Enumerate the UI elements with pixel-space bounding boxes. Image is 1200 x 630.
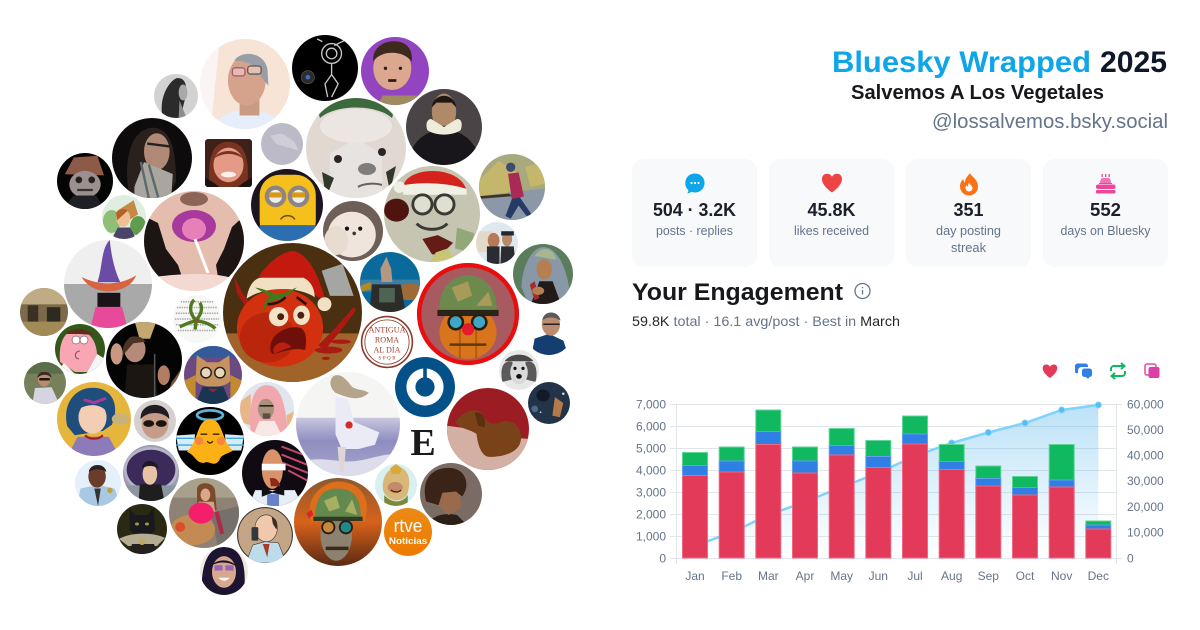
bar: Jan [682,452,708,558]
grid lines [670,404,1122,564]
right axis labels: 30,000 [1127,474,1164,488]
title: 2025 [1100,46,1167,79]
avatar: skull face [57,153,113,209]
left axis labels: 3,000 [636,486,666,500]
stat card: likes [769,159,894,267]
month labels: Apr [796,569,814,583]
month labels: Dec [1088,569,1109,583]
avatar: woman with clown [169,478,239,548]
avatar cluster [20,35,573,595]
bar: Mar [756,410,781,558]
bar: Sep [976,466,1001,558]
month labels: Mar [758,569,779,583]
display name: Salvemos A Los Vegetales [851,82,1104,104]
right axis labels: 60,000 [1127,398,1164,412]
bar: Jul [902,416,928,558]
avatar: woman with purple glasses [200,547,248,595]
avatar: antigua roma logo: ROMA [375,336,399,345]
icon: cake [1096,174,1116,194]
stat card: streak: day posting [936,224,1001,238]
avatar: white alpaca [306,98,406,198]
left axis labels: 6,000 [636,420,666,434]
left axis labels: 1,000 [636,530,666,544]
avatar: boba fett [360,252,420,312]
title: Bluesky Wrapped [832,46,1091,79]
bar: Apr [792,447,818,558]
avatar: scared tomato with santa hat [223,243,362,382]
avatar: rtve noticias logo: rtve [394,515,422,536]
bar: May [829,428,854,558]
icon: heart [822,174,842,192]
avatar: man with glasses [200,39,290,129]
left axis labels [636,398,666,566]
avatar: helmet zombie explosion [294,478,382,566]
stat card: streak: 351 [954,200,984,220]
right axis labels [1127,398,1164,566]
avatar: cartoon man in pod [123,445,179,501]
handle: @lossalvemos.bsky.social [932,111,1168,133]
stat card: posts and replies [632,159,757,267]
avatar: man in dark sunglasses [134,400,176,442]
right axis labels: 0 [1127,552,1134,566]
icon: replies legend [1075,364,1092,379]
avatar: woman with glasses [112,118,192,198]
month labels: Feb [721,569,742,583]
bar: Nov [1049,444,1074,558]
avatar: man in blue shirt [532,312,566,355]
month labels: Jul [907,569,923,583]
icon: quotes legend [1145,364,1160,378]
avatar: antigua roma logo: AL DÍA [374,344,401,354]
avatar: cat with glasses [184,346,242,404]
avatar: fluffy puppy [323,201,383,261]
cumulative line [695,402,1101,546]
avatar: santa glasses drawing [384,166,480,262]
avatar: pink bear costume [240,382,294,436]
month labels: Oct [1016,569,1035,583]
avatar: blue ring logo [395,357,455,417]
avatar: plant on sheet music [173,295,221,343]
stacked bars: replies reposts likes by month [682,410,1111,558]
month labels: Jun [869,569,888,583]
cumulative area [695,405,1098,558]
avatar: woman in white on the sea [296,372,400,476]
avatar: letter E logo: E [410,422,436,464]
left axis labels: 0 [659,552,666,566]
stat card: days on bluesky [1043,159,1168,267]
right axis labels: 10,000 [1127,526,1164,540]
avatar: lollipop lips [144,191,244,291]
right axis labels: 50,000 [1127,423,1164,437]
avatar: tintin character on phone [237,507,293,563]
avatar: el greco portrait [406,89,482,165]
avatar: anime woman [57,382,131,456]
avatar: dachshund on bed [447,388,529,470]
avatar: antigua roma logo: S·P·Q·R [378,356,396,361]
avatar: man on purple [361,37,429,105]
stat card: days on bluesky: days on Bluesky [1060,224,1151,238]
legend [1043,363,1160,379]
avatar: max headroom [242,440,308,506]
bar: Dec [1086,521,1111,558]
avatar: square portrait [205,139,252,187]
month labels: May [830,569,853,583]
avatar: grey portrait [154,74,198,118]
left axis labels: 2,000 [636,508,666,522]
avatar: peter griffin [55,324,105,374]
stat card: streak: streak [951,241,987,255]
avatar: walking woman [479,154,545,220]
avatar: minion [251,169,323,241]
avatar: caricature [375,464,417,506]
stat card: posts and replies: posts · replies [656,224,733,238]
avatar: grey texture [261,123,303,165]
avatar: galaxy [528,382,570,424]
avatar: policeman [75,460,121,506]
avatar: singer on stage [106,322,182,398]
avatar: antigua roma logo: ANTIGUA [369,325,406,334]
avatar: target stick figure [292,35,358,101]
icon: likes legend [1043,364,1057,378]
engagement chart [636,398,1164,583]
avatar: pumpkin soldier with red ring [417,263,519,365]
stat card: likes: 45.8K [808,200,856,220]
bar: Oct [1012,476,1038,558]
left axis labels: 4,000 [636,464,666,478]
avatar: dog in cap [499,350,539,390]
avatar: woman in sunglasses [24,362,66,404]
stat card: likes: likes received [794,224,869,238]
stat card: days on bluesky: 552 [1090,200,1121,220]
icon: reposts legend [1111,363,1125,379]
avatar: small anime [102,195,146,239]
icon: speech bubble [685,173,705,193]
month labels: Aug [941,569,962,583]
avatar: mona lisa with phone [513,244,573,304]
avatar: giant figures [476,222,518,264]
month labels: Nov [1051,569,1072,583]
bar: Jun [866,440,891,558]
icon: info [855,284,870,298]
avatar: antigua roma logo [360,315,414,369]
avatar: yellow angel ghost [176,407,244,475]
left axis labels: 7,000 [636,398,666,412]
section heading: Your Engagement [632,279,843,306]
avatar: rtve noticias logo: Noticias [389,536,427,546]
bar: Aug [939,444,964,558]
right axis labels: 40,000 [1127,448,1164,462]
icon: flame [960,173,978,196]
avatar: black cat portrait [117,504,167,554]
left axis labels: 5,000 [636,442,666,456]
avatar: witch hat [64,240,152,328]
month labels: Sep [978,569,999,583]
stat card: posts and replies: 504 · 3.2K [653,200,736,220]
avatar: old painting [20,288,68,336]
engagement summary: 59.8K total · 16.1 avg/post · Best in March [632,313,900,329]
bar: Feb [719,447,744,558]
avatar: rtve noticias logo [384,508,432,556]
stat card: streak [906,159,1031,267]
avatar: rembrandt portrait [420,463,482,525]
avatar: letter E logo [401,421,445,465]
month labels: Jan [685,569,705,583]
month labels [685,569,1109,583]
right axis labels: 20,000 [1127,500,1164,514]
